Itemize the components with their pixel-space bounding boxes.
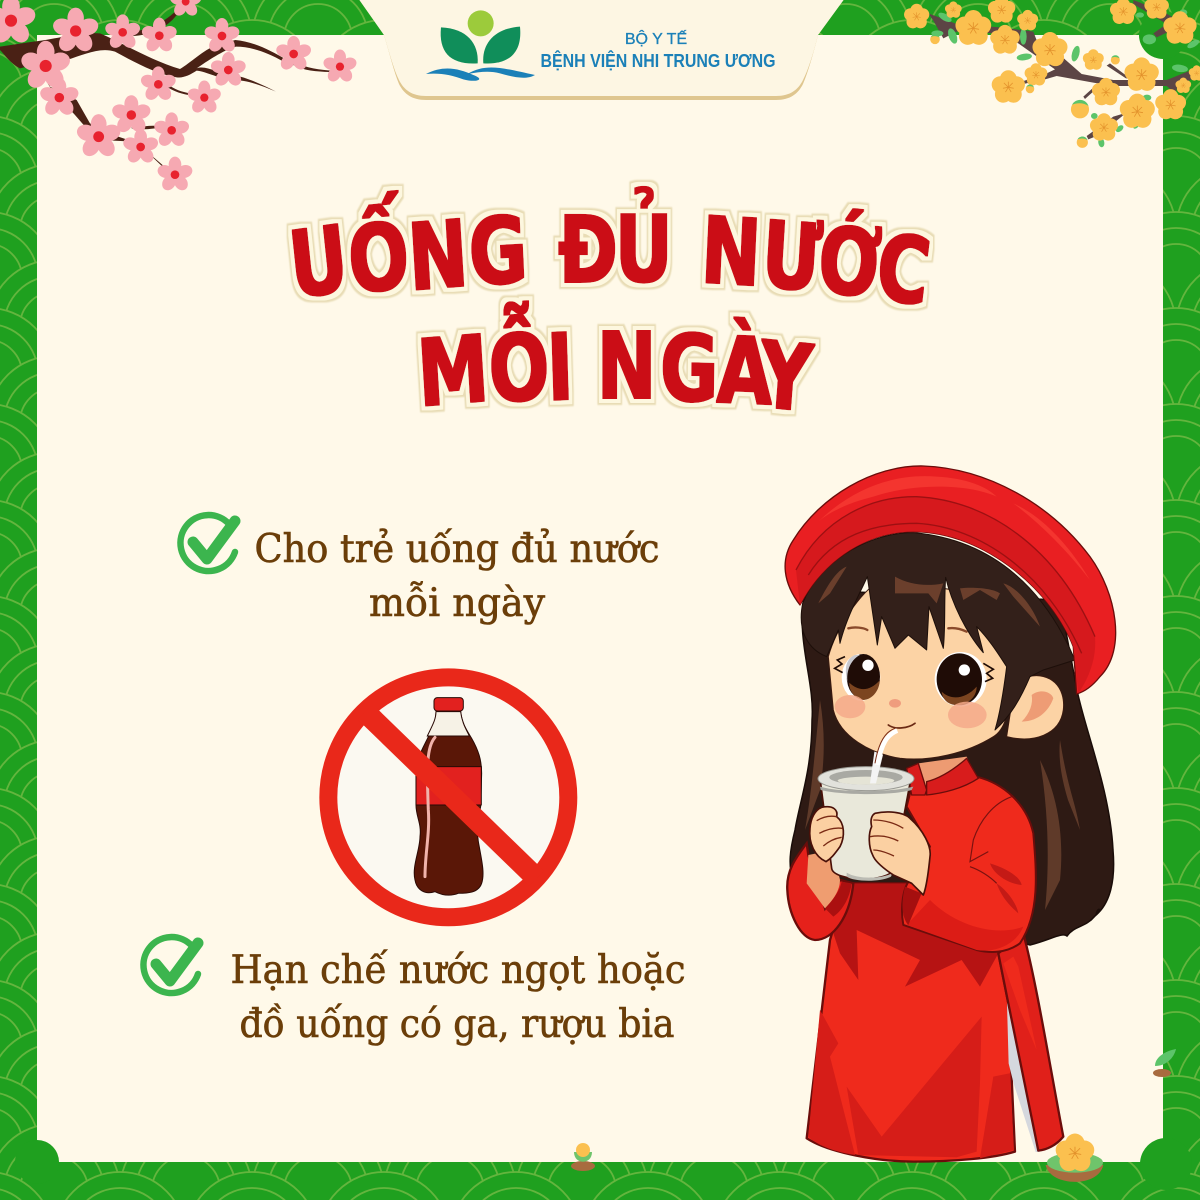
check item 1 — [180, 515, 660, 626]
logo emblem — [426, 10, 535, 81]
decoration: apricot blossom pot, bottom right — [1046, 1134, 1103, 1182]
ear — [1007, 676, 1064, 739]
right eye — [935, 652, 993, 707]
cherry blossom branch, top-left — [0, 0, 358, 193]
title — [284, 187, 936, 434]
left eye — [835, 654, 880, 701]
icon: green check — [143, 937, 198, 993]
apricot blossom branch, top-right — [902, 0, 1200, 148]
collar and neck — [907, 757, 978, 795]
eyebrows — [848, 627, 967, 632]
arms, cup and hands — [787, 740, 1036, 952]
title line 1: UỐNGĐỦNƯỚC — [284, 187, 936, 328]
no soda sign — [328, 677, 568, 917]
text: drink enough water: mỗi ngày — [369, 581, 545, 626]
icon: green check — [180, 515, 235, 571]
face — [828, 580, 1010, 759]
right hand — [869, 812, 930, 895]
decoration: leaf and seed, right edge — [1153, 1049, 1176, 1077]
decoration: bud, bottom centre — [571, 1143, 595, 1171]
hat — [785, 466, 1116, 694]
hair highlights — [818, 567, 1040, 627]
left sleeve — [787, 843, 853, 940]
bangs — [801, 533, 1075, 730]
logo text: BỘ Y TẾ — [625, 29, 687, 48]
blush — [835, 695, 865, 718]
prohibition bar — [365, 712, 537, 878]
header tab with hospital logo — [358, 0, 845, 100]
text: drink enough water: Cho trẻ uống đủ nước — [254, 527, 660, 572]
check item 2 — [143, 937, 686, 1047]
logo text — [540, 29, 776, 71]
logo text: BỆNH VIỆN NHI TRUNG ƯƠNG — [540, 50, 776, 71]
nose — [889, 699, 901, 708]
left hand — [810, 807, 843, 862]
mouth — [888, 723, 915, 728]
cup — [818, 740, 914, 881]
head — [785, 466, 1116, 765]
girl in red ao dai drinking water — [785, 466, 1116, 1162]
text: limit soft drinks and alcohol: đồ uống có ga, rượu bia — [240, 1002, 674, 1047]
back hair — [790, 590, 1114, 945]
title line 2: MỖINGÀY — [415, 300, 816, 434]
straw — [877, 731, 897, 765]
text: limit soft drinks and alcohol: Hạn chế nước ngọt hoặc — [230, 948, 686, 993]
torso and right sleeve — [902, 777, 1036, 952]
dress — [807, 883, 1063, 1162]
icon: soda bottle — [414, 698, 483, 895]
